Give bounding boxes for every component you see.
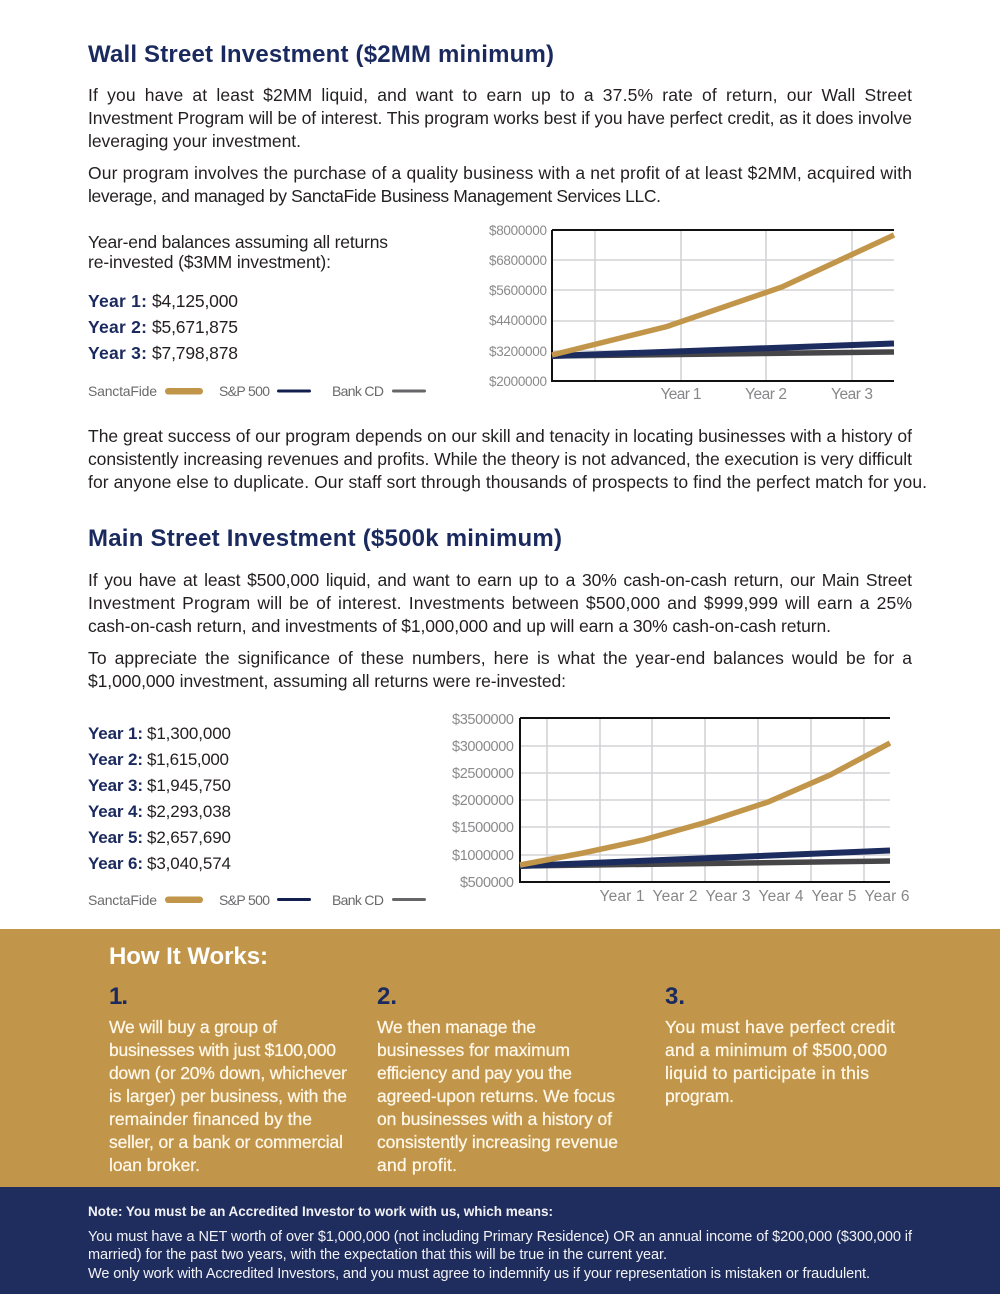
text block: Main Street intro: Investment Program will be of interest. Investments between $500,000 and $999,999 will earn a 25%	[88, 593, 912, 613]
line chart: Main Street returns: Year 3	[706, 888, 750, 905]
text block: Wall Street intro: Investment Program will be of interest. This program works best if you have perfect credit, as it does involve	[88, 108, 912, 128]
line chart: Wall Street returns: $3200000	[489, 344, 547, 359]
text block: year-end balances intro: Year-end balances assuming all returns	[88, 232, 388, 252]
step 1: remainder financed by the	[109, 1109, 312, 1129]
note text	[88, 1229, 913, 1282]
text block: Main Street balances intro: $1,000,000 investment, assuming all returns were re-invested:	[88, 671, 566, 691]
step 2: efficiency and pay you the	[377, 1063, 572, 1083]
legend: Wall Street chart	[88, 383, 426, 399]
legend: Wall Street chart: SanctaFide	[88, 383, 157, 399]
step 2: 2.	[377, 983, 397, 1010]
text block: success of the program: for anyone else to duplicate. Our staff sort through thousands of prospects to find the perfect match for you.	[88, 472, 927, 492]
step 2: businesses for maximum	[377, 1040, 570, 1060]
list: Wall Street year-end balances: Year 3:	[88, 343, 147, 363]
list: Main Street year-end balances: $1,300,000	[147, 724, 231, 743]
heading: Wall Street Investment: Wall Street Investment ($2MM minimum)	[88, 41, 554, 68]
list: Main Street year-end balances: $3,040,574	[147, 854, 231, 873]
list: Main Street year-end balances: $1,945,750	[147, 776, 231, 795]
line chart: Main Street returns: $3500000	[452, 712, 514, 728]
step 2: agreed-upon returns. We focus	[377, 1086, 615, 1106]
list: Wall Street year-end balances	[88, 291, 238, 363]
list: Main Street year-end balances: $2,657,690	[147, 828, 231, 847]
list: Main Street year-end balances: Year 6:	[88, 854, 143, 873]
text block: Wall Street intro	[88, 85, 912, 151]
legend: Main Street chart: S&P 500	[219, 892, 270, 908]
heading: Main Street Investment: Main Street Investment ($500k minimum)	[88, 525, 562, 552]
text block: Main Street intro: cash-on-cash return, and investments of $1,000,000 and up will earn a 30% cash-on-cash return.	[88, 616, 831, 636]
line chart: Wall Street returns: $4400000	[489, 313, 547, 328]
legend: Wall Street chart: Bank CD	[332, 383, 384, 399]
line chart: Main Street returns: $1500000	[452, 820, 514, 836]
line chart: Main Street returns: $500000	[460, 875, 514, 891]
text block: success of the program: consistently increasing revenues and profits. While the theory is not advanced, the execution is very difficult	[88, 449, 912, 469]
note text: married) for the past two years, with the expectation that this will be true in the current year.	[88, 1247, 667, 1263]
list: Wall Street year-end balances: $4,125,000	[152, 291, 238, 311]
step 2: on businesses with a history of	[377, 1109, 612, 1129]
line chart: Main Street returns: $1000000	[452, 848, 514, 864]
step 1: businesses with just $100,000	[109, 1040, 336, 1060]
step 3	[665, 983, 895, 1106]
line chart: Main Street returns: Year 6	[864, 888, 910, 905]
list: Main Street year-end balances: Year 2:	[88, 750, 143, 769]
step 3: liquid to participate in this	[665, 1063, 869, 1083]
text block: year-end balances intro	[88, 232, 388, 272]
step 2	[377, 983, 618, 1175]
heading: How It Works: How It Works:	[109, 943, 268, 970]
list: Main Street year-end balances: Year 4:	[88, 802, 143, 821]
list: Wall Street year-end balances: $7,798,878	[152, 343, 238, 363]
note heading: Note: You must be an Accredited Investor to work with us, which means:	[88, 1204, 553, 1219]
list: Main Street year-end balances: $2,293,038	[147, 802, 231, 821]
line chart: Main Street returns: Year 4	[758, 888, 804, 905]
list: Main Street year-end balances: Year 5:	[88, 828, 143, 847]
step 2: consistently increasing revenue	[377, 1132, 618, 1152]
panel: Accredited Investor note	[0, 1187, 1000, 1294]
line chart: Main Street returns: $2000000	[452, 793, 514, 809]
line chart: Wall Street returns: $5600000	[489, 283, 547, 298]
text block: Main Street intro	[88, 570, 912, 636]
step 2: We then manage the	[377, 1017, 536, 1037]
text block: Wall Street intro: If you have at least $2MM liquid, and want to earn up to a 37.5% rate of return, our Wall Street	[88, 85, 912, 105]
text block: Wall Street program description: Our program involves the purchase of a quality business with a net profit of at least $2MM, acquired with	[88, 163, 912, 183]
legend: Main Street chart	[88, 892, 426, 908]
text block: success of the program	[88, 426, 927, 492]
legend: Main Street chart: Bank CD	[332, 892, 384, 908]
step 1: 1.	[109, 983, 128, 1010]
step 1: We will buy a group of	[109, 1017, 277, 1037]
step 1: loan broker.	[109, 1155, 200, 1175]
step 1: seller, or a bank or commercial	[109, 1132, 343, 1152]
text block: Wall Street program description	[88, 163, 912, 206]
step 1: is larger) per business, with the	[109, 1086, 347, 1106]
list: Main Street year-end balances: $1,615,000	[147, 750, 229, 769]
step 3: program.	[665, 1086, 734, 1106]
note text: You must have a NET worth of over $1,000,000 (not including Primary Residence) OR an annual income of $200,000 ($300,000 if	[88, 1229, 913, 1245]
list: Main Street year-end balances	[88, 724, 231, 873]
step 1: down (or 20% down, whichever	[109, 1063, 347, 1083]
panel: How It Works	[0, 929, 1000, 1187]
line chart: Main Street returns	[452, 712, 910, 905]
text block: Wall Street intro: leveraging your investment.	[88, 131, 301, 151]
step 1	[109, 983, 347, 1175]
text block: Main Street intro: If you have at least $500,000 liquid, and want to earn up to a 30% cash-on-cash return, our Main Street	[88, 570, 912, 590]
text block: year-end balances intro: re-invested ($3MM investment):	[88, 252, 331, 272]
line chart: Wall Street returns: $2000000	[489, 374, 547, 389]
line chart: Wall Street returns	[489, 223, 894, 403]
list: Wall Street year-end balances: Year 1:	[88, 291, 147, 311]
text block: Main Street balances intro	[88, 648, 912, 691]
text block: Main Street balances intro: To appreciate the significance of these numbers, here is what the year-end balances would be for a	[88, 648, 912, 668]
line chart: Wall Street returns: Year 1	[660, 386, 702, 403]
list: Main Street year-end balances: Year 1:	[88, 724, 143, 743]
line chart: Main Street returns: $3000000	[452, 739, 514, 755]
text block: Wall Street program description: leverage, and managed by SanctaFide Business Management Services LLC.	[88, 186, 661, 206]
line chart: Main Street returns: $2500000	[452, 766, 514, 782]
list: Wall Street year-end balances: Year 2:	[88, 317, 147, 337]
line chart: Main Street returns: Year 1	[600, 888, 644, 905]
line chart: Wall Street returns: Year 2	[745, 386, 787, 403]
note text: We only work with Accredited Investors, and you must agree to indemnify us if your representation is mistaken or fraudulent.	[88, 1266, 870, 1282]
line chart: Wall Street returns: $8000000	[489, 223, 547, 238]
line chart: Wall Street returns: $6800000	[489, 253, 547, 268]
step 3: You must have perfect credit	[665, 1017, 895, 1037]
list: Main Street year-end balances: Year 3:	[88, 776, 143, 795]
legend: Main Street chart: SanctaFide	[88, 892, 157, 908]
step 2: and profit.	[377, 1155, 457, 1175]
step 3: 3.	[665, 983, 685, 1010]
legend: Wall Street chart: S&P 500	[219, 383, 270, 399]
line chart: Main Street returns: Year 5	[812, 888, 856, 905]
step 3: and a minimum of $500,000	[665, 1040, 887, 1060]
list: Wall Street year-end balances: $5,671,875	[152, 317, 238, 337]
line chart: Wall Street returns: Year 3	[831, 386, 873, 403]
text block: success of the program: The great success of our program depends on our skill and tenacity in locating businesses with a history of	[88, 426, 912, 446]
line chart: Main Street returns: Year 2	[652, 888, 698, 905]
